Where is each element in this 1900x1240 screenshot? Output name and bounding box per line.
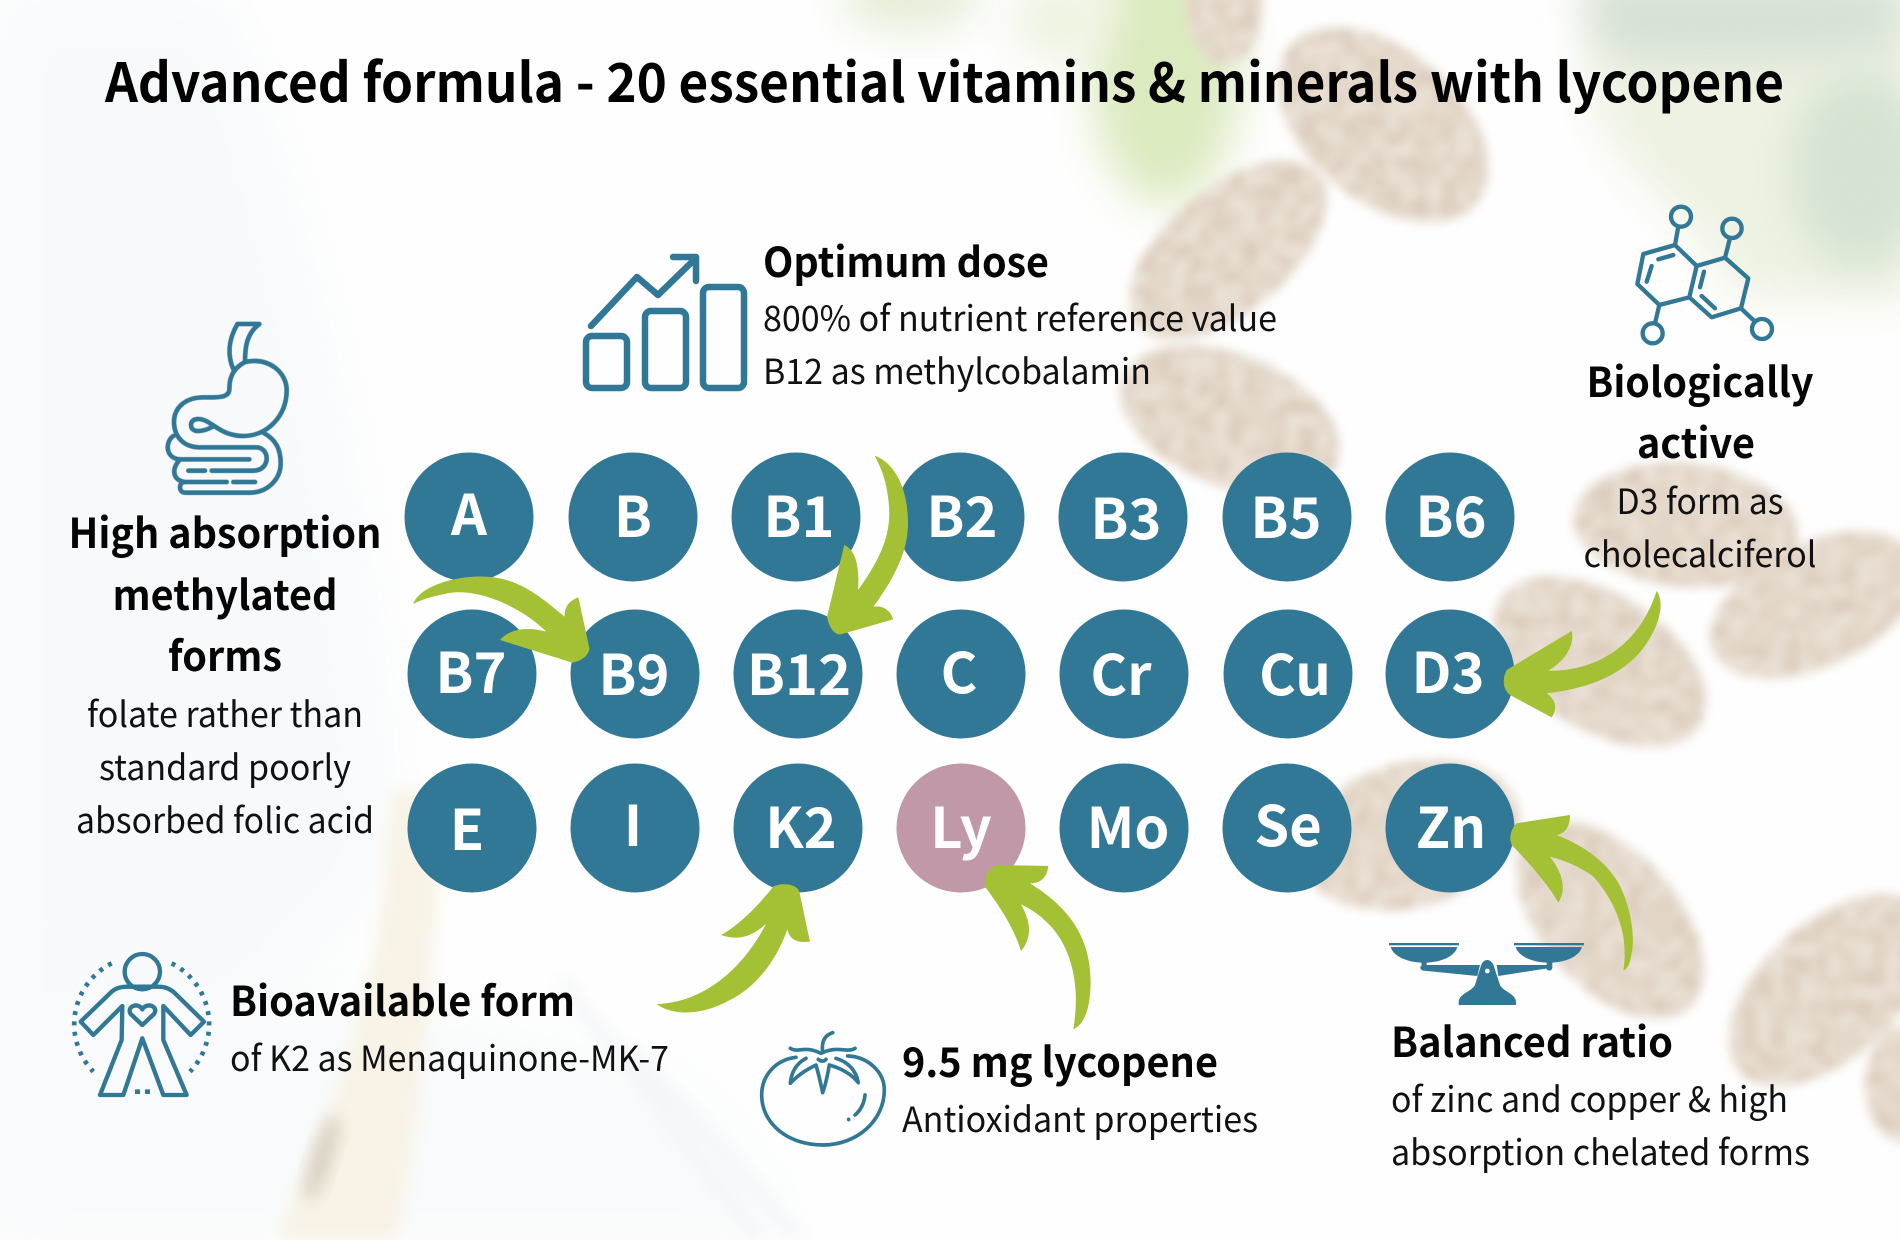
text block: optimum dose: B12 as methylcobalamin — [763, 344, 1151, 395]
nutrient circles grid — [404, 452, 1514, 892]
text block: optimum dose — [763, 229, 1277, 395]
text block: bioavailable form: Bioavailable form — [230, 968, 575, 1028]
text block: biologically active — [1584, 349, 1816, 578]
nutrient circles grid: B — [614, 473, 652, 554]
text block: high absorption: standard poorly — [99, 740, 351, 791]
text block: optimum dose: 800% of nutrient reference value — [763, 291, 1277, 342]
text block: lycopene: Antioxidant properties — [902, 1092, 1258, 1143]
icon: molecule — [1637, 207, 1772, 343]
nutrient circles grid: B6 — [1415, 473, 1487, 554]
icon: tomato — [762, 1033, 884, 1145]
nutrient circles grid: E — [450, 786, 484, 867]
nutrient circles grid: B12 — [747, 631, 851, 712]
text block: balanced ratio: Balanced ratio — [1391, 1009, 1673, 1069]
title: Advanced formula - 20 essential vitamins & minerals with lycopene — [104, 39, 1784, 118]
text block: bioavailable form — [230, 968, 669, 1082]
text block: biologically active: active — [1637, 410, 1755, 470]
text block: high absorption: forms — [168, 623, 282, 683]
icon: human body with heart — [74, 954, 209, 1095]
arrow: to B12 — [827, 456, 908, 634]
text block: balanced ratio: of zinc and copper & high — [1391, 1072, 1788, 1123]
arrow: to K2 — [657, 884, 810, 1012]
nutrient circles grid: D3 — [1411, 629, 1485, 710]
nutrient circles grid: B1 — [763, 473, 835, 554]
text block: high absorption: absorbed folic acid — [76, 793, 374, 844]
text block: balanced ratio: absorption chelated forms — [1391, 1125, 1810, 1176]
icon: bar chart with rising arrow — [586, 257, 744, 388]
nutrient circles grid: Ly — [930, 784, 992, 865]
text block: high absorption: High absorption — [68, 500, 382, 560]
nutrient circles grid: Mo — [1087, 784, 1169, 865]
nutrient circles grid: I — [624, 782, 642, 863]
text block: bioavailable form: of K2 as Menaquinone-MK-7 — [230, 1031, 669, 1082]
text block: lycopene: 9.5 mg lycopene — [902, 1029, 1218, 1089]
text block: optimum dose: Optimum dose — [763, 229, 1049, 289]
text block: balanced ratio — [1391, 1009, 1810, 1176]
arrow: to D3 — [1504, 591, 1661, 717]
text block: high absorption — [68, 500, 382, 844]
nutrient circles grid: B9 — [598, 631, 670, 712]
arrow: to Zn — [1510, 815, 1633, 971]
nutrient circles grid: Se — [1254, 782, 1322, 863]
nutrient circles grid: B2 — [926, 473, 998, 554]
nutrient circles grid: B5 — [1250, 474, 1322, 555]
arrow: to B9 — [413, 576, 589, 663]
icon: balance scale — [1389, 943, 1584, 1005]
nutrient circles grid: A — [450, 471, 488, 552]
nutrient circles grid: Cr — [1090, 631, 1152, 712]
nutrient circles grid: Cu — [1259, 631, 1331, 712]
text block: high absorption: methylated — [112, 562, 338, 622]
nutrient circles grid: B7 — [435, 629, 507, 710]
nutrient circles grid: Zn — [1416, 784, 1486, 865]
text block: biologically active: D3 form as — [1616, 474, 1784, 525]
arrow: to Ly — [985, 865, 1091, 1029]
text block: biologically active: cholecalciferol — [1584, 527, 1816, 578]
nutrient circles grid: C — [941, 629, 977, 710]
text block: biologically active: Biologically — [1586, 349, 1814, 409]
nutrient circles grid: B3 — [1090, 475, 1162, 556]
text block: high absorption: folate rather than — [87, 687, 363, 738]
icon: stomach and intestines — [168, 324, 287, 493]
nutrient circles grid: K2 — [765, 784, 837, 865]
text block: lycopene — [902, 1029, 1258, 1143]
